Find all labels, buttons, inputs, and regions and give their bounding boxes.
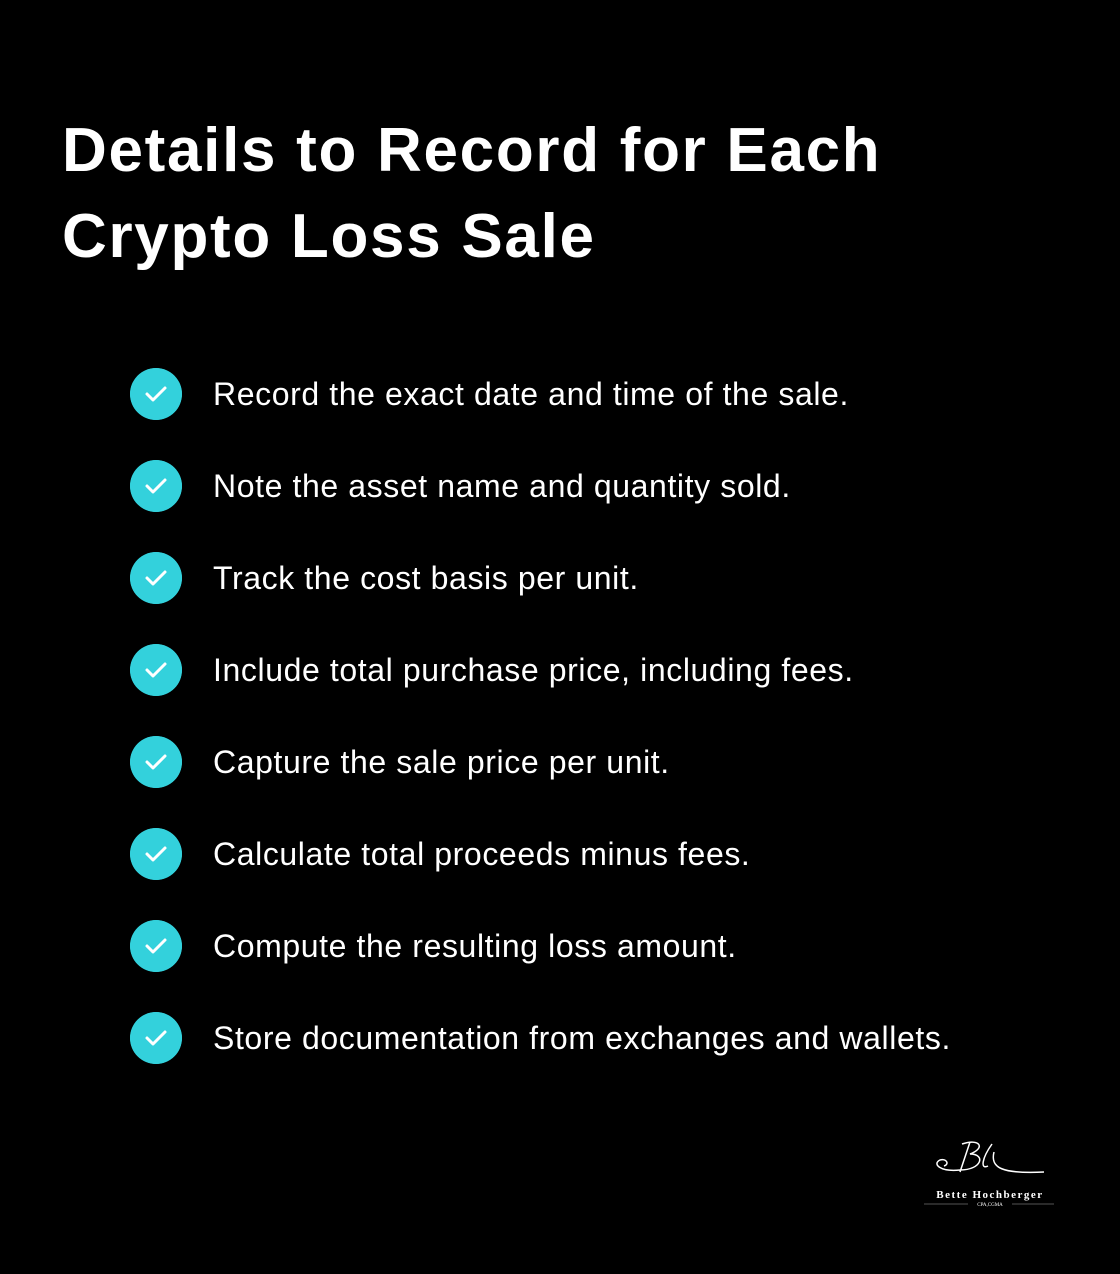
logo: Bette Hochberger signature	[924, 1141, 1054, 1208]
logo: Bette Hochberger signature: CPA,CGMA	[977, 1203, 1003, 1208]
checklist	[130, 368, 951, 1064]
item 3	[130, 552, 639, 604]
logo: Bette Hochberger signature: Bette Hochberger	[936, 1189, 1044, 1201]
title	[62, 116, 881, 271]
item 7	[130, 920, 737, 972]
item 4: Include total purchase price, including fees.	[213, 652, 854, 688]
item 3: Track the cost basis per unit.	[213, 560, 639, 596]
item 1: Record the exact date and time of the sale.	[213, 376, 849, 412]
item 5: Capture the sale price per unit.	[213, 744, 670, 780]
item 2: Note the asset name and quantity sold.	[213, 468, 791, 504]
item 7: Compute the resulting loss amount.	[213, 928, 737, 964]
title: Details to Record for Each	[62, 116, 881, 185]
item 8	[130, 1012, 951, 1064]
item 6: Calculate total proceeds minus fees.	[213, 836, 750, 872]
title: Crypto Loss Sale	[62, 202, 596, 271]
item 5	[130, 736, 670, 788]
item 6	[130, 828, 750, 880]
item 2	[130, 460, 791, 512]
item 4	[130, 644, 854, 696]
item 1	[130, 368, 849, 420]
item 8: Store documentation from exchanges and wallets.	[213, 1020, 951, 1056]
